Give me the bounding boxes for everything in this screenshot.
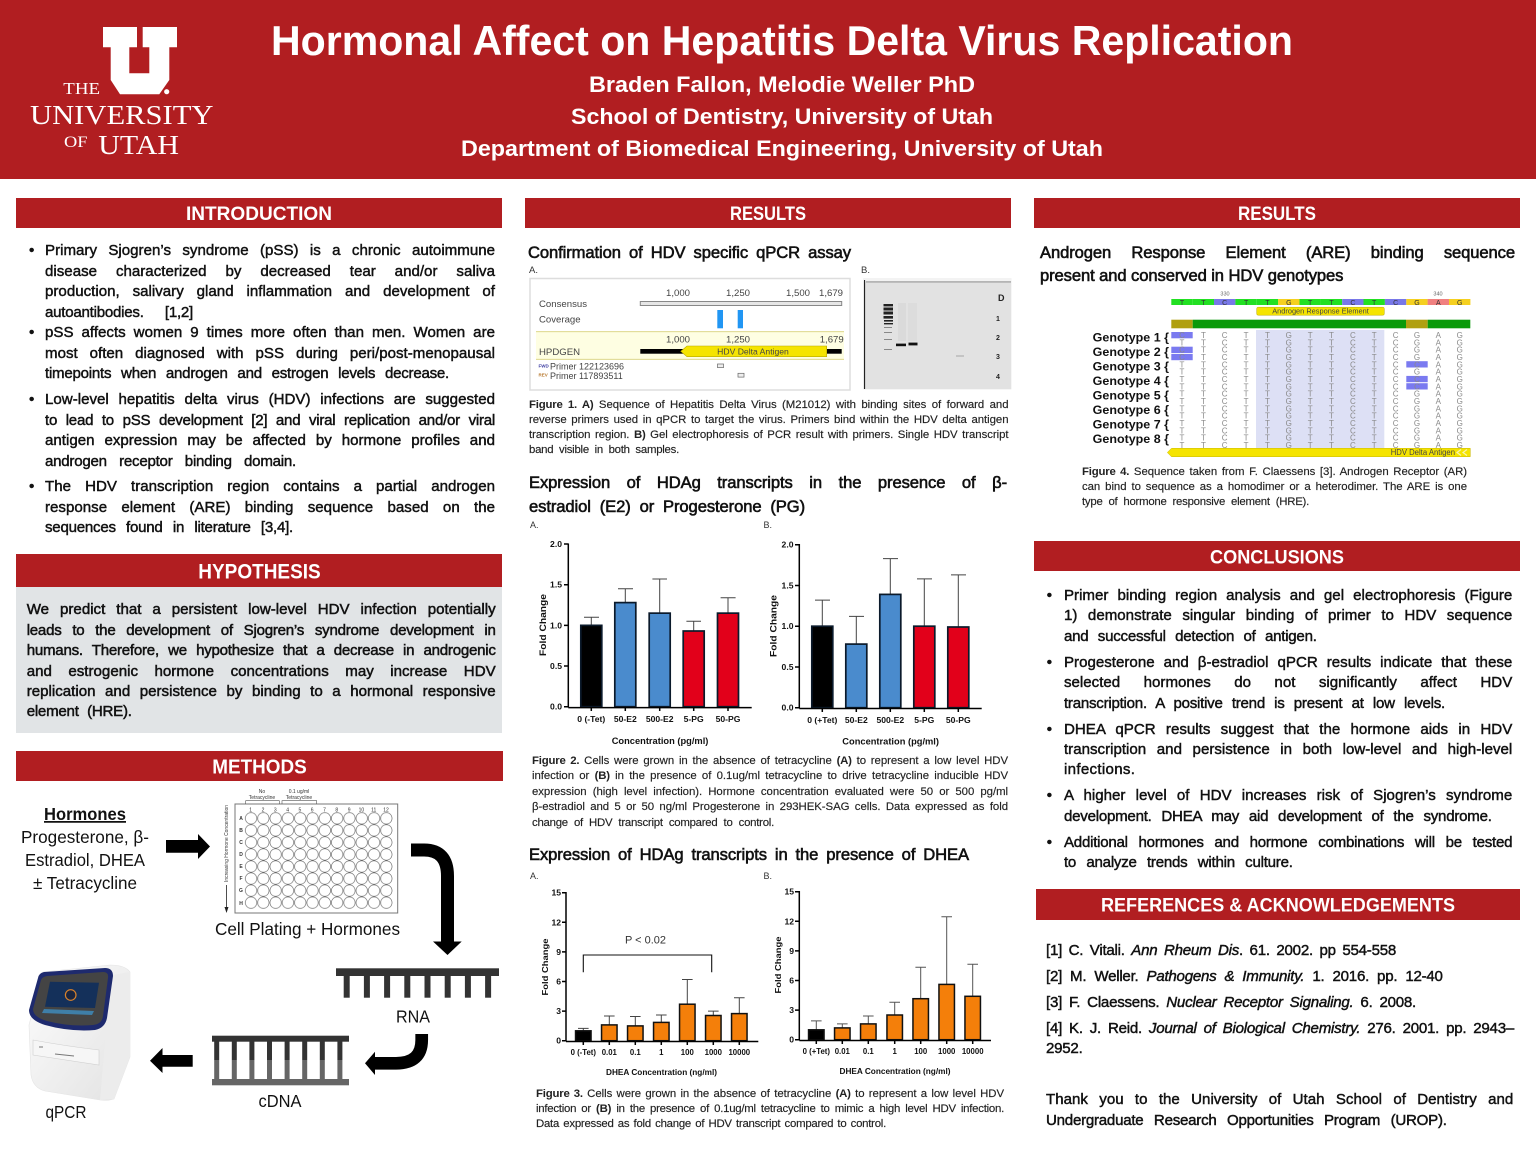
bar chart: figure 3A: A. [530,871,539,881]
authors and affiliations: Department of Biomedical Engineering, University of Utah [461,136,1103,161]
bullet: primer binding analysis: Primer binding region analysis and gel electrophoresis (Figure [1064,587,1512,604]
acknowledgements: Thank you to the University of Utah School of Dentistry and [1046,1091,1513,1108]
reference 4: 2952. [1046,1040,1083,1057]
figure 1B: gel electrophoresis: 3 [996,354,1000,361]
bar chart: figure 3B: 0.1 [863,1047,874,1056]
bar chart: figure 2B [764,520,982,748]
bar chart: figure 2A: 50-PG [716,714,741,724]
bar chart: figure 2A: Fold Change [538,594,549,656]
caption: figure 3: infection or (B) in the presence of 0.1ug/ml tetracycline to mimic a high level HDV infection. [536,1102,1004,1114]
alignment rows: TTCTTGTTCTCGAG [1180,441,1463,450]
acknowledgements: Undergraduate Research Opportunities Program (UROP). [1046,1112,1447,1129]
alignment rows: TTCTTGTTCTCGAG [1180,434,1463,443]
bar chart: figure 3A: 15 [551,888,561,898]
genotype labels: Genotype 6 { [1093,403,1169,417]
hypothesis text box [16,587,502,733]
bar chart: figure 3A: 1 [659,1048,664,1057]
subheading: qPCR assay: Confirmation of HDV specific qPCR assay [528,243,851,262]
authors and affiliations: School of Dentistry, University of Utah [571,104,993,129]
icon: 96-well plate: 12 [383,808,389,814]
caption: figure 4 [1082,466,1467,508]
bar chart: figure 3B: 9 [789,946,794,956]
caption: figure 2: Figure 2. Cells were grown in the absence of tetracycline (A) to represent a low level HDV [532,755,1008,767]
alignment rows: TTCTTGTTCTCGAG [1180,368,1463,377]
authors and affiliations [461,72,1103,161]
bullet: low-level HDV infections: androgen receptor binding domain. [45,453,296,470]
genotype labels [1093,330,1169,446]
panel: methods [16,751,503,1122]
alignment rows: TTCTTGTTCTCGAG [1180,426,1463,435]
bar chart: figure 3A [530,871,758,1077]
bullet: HDV transcription region: • [29,478,34,495]
bar chart: figure 2B: 1.5 [782,580,794,590]
subheading: E2 and PG expression [529,473,1007,516]
genotype labels: Genotype 5 { [1093,388,1169,402]
bar chart: figure 3B: 3 [789,1005,794,1015]
bar chart: figure 2A: Concentration (pg/ml) [612,736,708,747]
arrow: hormones to plate [166,834,210,859]
bar chart: figure 3A: 10000 [728,1048,751,1057]
bar chart: figure 3A: 6 [556,976,561,986]
bullet: DHEA results: transcription and persistence in both low-level and high-level [1064,741,1512,758]
reference sequence row: TTCTTGTTCTCGAG [1180,300,1462,307]
genotype labels: Genotype 3 { [1093,360,1169,374]
reference 2: [2] M. Weller. Pathogens & Immunity. 1. 2016. pp. 12-40 [1046,968,1443,985]
logo: University of Utah [30,27,214,160]
bullet: pSS affects women [29,324,495,382]
bar chart: figure 3B: 0.01 [835,1047,851,1056]
bullet: low-level HDV infections [29,391,495,470]
icon: 96-well plate: G [239,888,243,894]
alignment rows: TTCTTGTTCTCGAG [1180,412,1463,421]
bullet: risk of Sjogren's syndrome [1047,787,1512,825]
figure 1B: gel electrophoresis: 1 [996,316,1000,323]
genotype labels: Genotype 8 { [1093,432,1169,446]
bullet: HDV transcription region: sequences found in literature [3,4]. [45,519,293,536]
bar chart: figure 3B: 6 [789,976,794,986]
bar chart: figure 2B: B. [764,520,772,530]
hypothesis text box: element (HRE). [27,703,132,720]
caption: figure 2: expression (high level infection). Hormone concentration evaluated were 50 or 500 pg/ml [532,786,1008,798]
bullet: additional hormones [1047,834,1512,871]
alignment rows: TTCTTGTTCTCGAG [1180,404,1463,413]
icon: 96-well plate: 11 [371,808,377,814]
alignment rows: CTCTTGTTCTCGAG [1179,331,1463,340]
icon: cDNA double strand [212,1036,349,1085]
bar chart: figure 3A: DHEA Concentration (ng/ml) [606,1067,717,1077]
bar chart: figure 3B: DHEA Concentration (ng/ml) [840,1066,951,1076]
figure 1A: primer map: HDV Delta Antigen [717,346,789,356]
bullet: primer binding analysis: and successful detection of antigen. [1064,628,1317,645]
figure 4: sequence alignment [1093,292,1471,457]
bar chart: figure 2B: 2.0 [782,540,794,550]
logo: University of Utah: OF [64,134,88,151]
annotation: androgen response element: Androgen Response Element [1272,306,1369,316]
bar chart: figure 2B: 0 (+Tet) [807,715,838,725]
reference sequence row: 340 [1433,292,1443,298]
heading: results [525,198,1011,228]
caption: figure 2: infection or (B) in the presence of 0.1ug/ml tetracycline to drive tetracycline inducible HDV [532,770,1008,782]
figure 1B: gel electrophoresis [861,265,1011,389]
bullet: DHEA results: • [1047,721,1052,738]
bar chart: figure 2A: 2.0 [550,539,562,549]
figure 1A: primer map: Coverage [539,314,581,325]
bar chart: figure 2B: 1.0 [782,621,794,631]
bullet: pSS affects women: most often diagnosed with pSS during peri/post-menopausal [45,345,495,362]
alignment rows: TTCTTGTTCTCGAG [1180,390,1463,399]
bar chart: figure 3A: 0.1 [630,1048,641,1057]
bullet: pSS affects women: timepoints when androgen and estrogen levels decrease. [45,365,449,382]
bullet: DHEA results [1047,721,1512,778]
icon: 96-well plate: D [239,852,243,858]
bullet: primer binding analysis: • [1047,587,1052,604]
subheading: E2 and PG expression: Expression of HDAg transcripts in the presence of β- [529,473,1007,492]
figure 1A: primer map: 1,000 [666,334,690,345]
icon: 96-well plate: F [239,876,243,882]
title: Hormonal Affect on Hepatitis Delta Virus Replication [271,17,1293,64]
icon: 96-well plate [224,789,398,913]
hypothesis text box: leads to the development of Sjogren’s syndrome development in [27,622,496,639]
figure 1A: primer map: 1,500 [786,288,810,299]
figure 1A: primer map: 1,000 [666,288,690,299]
bar chart: figure 3B [764,871,991,1076]
figure 1 [529,265,1012,391]
caption: figure 4: type of hormone responsive element (HRE). [1082,496,1309,508]
caption: figure 1: transcription region. B) Gel electrophoresis of PCR result with primers. Single HDV transcript [529,429,1008,441]
heading: conclusions: CONCLUSIONS [1210,546,1344,568]
bar chart: figure 3A: 0 (-Tet) [571,1048,596,1057]
bullet: low-level HDV infections: Low-level hepatitis delta virus (HDV) infections are suggested [45,391,495,408]
heading: conclusions [1034,541,1520,571]
workflow diagram [21,789,499,1122]
bullet: progesterone and estradiol results: selected hormones do not significantly affect HDV [1064,674,1512,691]
significance bracket: P < 0.02 [625,935,666,947]
logo: University of Utah: THE [63,79,100,98]
bar chart: figure 3A: 9 [556,947,561,957]
bar chart: figure 3B: 0 [789,1035,794,1045]
figure 2 [530,520,982,748]
bar chart: figure 3A: Fold Change [540,938,550,996]
icon: 96-well plate: H [239,901,243,907]
reference 3: [3] F. Claessens. Nuclear Receptor Signaling. 6. 2008. [1046,994,1416,1011]
panel: hypothesis [16,554,502,733]
subheading: androgen response element [1040,243,1515,285]
figure 1A: primer map: FWD [538,364,549,368]
caption: figure 3: Figure 3. Cells were grown in the absence of tetracycline (A) to represent a low level HDV [536,1088,1004,1100]
heading: hypothesis [16,554,502,587]
subheading: E2 and PG expression: estradiol (E2) or Progesterone (PG) [529,497,805,516]
bullet: DHEA results: DHEA qPCR results suggest that the hormone aids in HDV [1064,721,1512,738]
figure 1B: gel electrophoresis: 2 [996,335,1000,342]
heading: methods: METHODS [212,756,307,778]
hypothesis text box: replication and persistence by binding to a hormonal responsive [27,683,496,700]
bullet: HDV transcription region: response element (ARE) binding sequence based on the [45,499,495,516]
alignment rows: TTCTTGTTCTCGAG [1180,338,1463,347]
caption: figure 3 [536,1088,1004,1130]
subheading: androgen response element: present and conserved in HDV genotypes [1040,266,1343,285]
bar chart: figure 2A: 500-E2 [646,714,674,724]
bar chart: figure 2B: Concentration (pg/ml) [842,736,939,748]
figure 1A: primer map: Consensus [539,299,587,310]
figure 1A: primer map: Primer 117893511 [550,371,623,381]
text: hormones list: Estradiol, DHEA [25,850,145,870]
bar chart: figure 2B: 0.5 [782,662,794,672]
hypothesis text box: and estrogenic hormone concentrations may increase HDV [27,663,496,680]
alignment rows: CTCTTGTTCTCGAG [1179,353,1463,362]
bullet: primary Sjogren's syndrome: • [29,242,34,259]
icon: 96-well plate: Tetracycline [249,795,275,801]
bullet: additional hormones: Additional hormones and hormone combinations will be tested [1064,834,1512,851]
bar chart: figure 3B: 15 [784,887,794,897]
bullet: risk of Sjogren's syndrome: A higher level of HDV increases risk of Sjogren’s syndrome [1064,787,1512,804]
bullet: pSS affects women: pSS affects women 9 times more often than men. Women are [45,324,495,341]
bar chart: figure 3A: 0.01 [602,1048,618,1057]
annotation: HDV delta antigen arrow: HDV Delta Antigen [1391,448,1455,457]
bar chart: figure 2A: 0.5 [550,661,562,671]
figure 1A: primer map: A. [529,265,538,276]
heading: introduction [16,198,502,228]
caption: figure 2 [532,755,1008,829]
figure 1B: gel electrophoresis: B. [861,265,870,276]
panel: conclusions [1034,541,1520,871]
caption: figure 4: can bind to sequence as a homodimer or a heterodimer. The ARE is one [1082,480,1467,492]
bar chart: figure 3A: 3 [556,1006,561,1016]
panel: results right column [1034,198,1520,508]
label: RNA: RNA [396,1007,430,1027]
bar chart: figure 3B: 100 [914,1047,928,1056]
bullet: low-level HDV infections: antigen expression may be affected by hormone profiles and [45,432,495,449]
label: qPCR: qPCR [46,1102,86,1122]
bar chart: figure 3B: B. [764,871,772,881]
reference 1: [1] C. Vitali. Ann Rheum Dis. 61. 2002. pp 554-558 [1046,942,1396,959]
bullet: primary Sjogren's syndrome [29,242,496,321]
hypothesis text box: humans. Therefore, we hypothesize that a decrease in androgenic [27,642,496,659]
icon: 96-well plate: 10 [359,808,364,814]
bar chart: figure 3A: 12 [551,917,561,927]
bullet: low-level HDV infections: • [29,391,34,408]
alignment rows: TTCTTGTTCTCCAG [1180,360,1463,369]
reference 4: [4] K. J. Reid. Journal of Biological Chemistry. 276. 2001. pp. 2943– [1046,1020,1514,1037]
text: hormones list [21,804,149,893]
icon: 96-well plate: E [239,864,243,870]
bullet: low-level HDV infections: to lead to pSS development [2] and viral replication and/or viral [45,412,495,429]
bullet: HDV transcription region [29,478,495,536]
alignment rows [1171,330,1463,450]
bullet: DHEA results: infections. [1064,761,1135,778]
alignment rows: TTCTTGTTCTCCAG [1180,375,1463,384]
bullet: pSS affects women: • [29,324,34,341]
bar chart: figure 2A: 1.0 [550,620,562,630]
bar chart: figure 3B: 1000 [938,1047,956,1056]
arrow: plate to RNA [411,850,462,955]
bar chart: figure 3B: 1 [893,1047,898,1056]
bar chart: figure 2A: 0 (-Tet) [577,714,605,724]
bar chart: figure 2A [530,520,752,747]
bullet: additional hormones: • [1047,834,1052,851]
icon: 96-well plate: A [239,816,243,822]
panel: results middle column [525,198,1012,1130]
genotype labels: Genotype 7 { [1093,418,1169,432]
bar chart: figure 2A: A. [530,520,539,530]
bullet: progesterone and estradiol results: Progesterone and β-estradiol qPCR results indicate that these [1064,654,1512,671]
bar chart: figure 2B: 50-PG [946,715,971,725]
figure 1A: primer map: 1,679 [820,334,844,345]
icon: 96-well plate: B [239,828,243,834]
bullet: primer binding analysis: 1) demonstrate singular binding of primer to HDV sequence [1064,607,1512,624]
bullet: primary Sjogren's syndrome: autoantibodies. [1,2] [45,304,193,321]
caption: figure 1: band visible in both samples. [529,444,679,456]
bullet: primary Sjogren's syndrome: production, salivary gland inflammation and development of [45,283,495,300]
subheading: androgen response element: Androgen Response Element (ARE) binding sequence [1040,243,1515,262]
caption: figure 1 [529,399,1009,456]
bar chart: figure 2A: 50-E2 [614,714,637,724]
heading: results [1034,198,1520,228]
bar chart: figure 3B: 10000 [962,1047,984,1056]
bar chart: figure 2B: 50-E2 [845,715,868,725]
bar chart: figure 2B: 5-PG [914,715,935,725]
reference 4 [1046,1019,1514,1059]
bar chart: figure 3B: 12 [784,916,794,926]
bullet: progesterone and estradiol results: transcription. A positive trend is present at low levels. [1064,695,1445,712]
authors and affiliations: Braden Fallon, Melodie Weller PhD [589,72,975,97]
logo: University of Utah: UTAH [98,130,179,160]
figure 1A: primer map: 1,250 [726,288,750,299]
header banner [0,0,1536,179]
icon: 96-well plate: Tetracycline [286,795,312,801]
icon: qPCR machine [29,965,130,1100]
annotation: HDV delta antigen arrow [1167,448,1470,457]
icon: 96-well plate: No [259,789,265,795]
panel: introduction [16,198,502,536]
text: hormones list: ± Tetracycline [33,873,137,893]
icon: RNA strand [336,968,499,998]
caption: figure 4: Figure 4. Sequence taken from F. Claessens [3]. Androgen Receptor (AR) [1082,466,1467,478]
genotype labels: Genotype 1 { [1093,330,1169,344]
heading: results: RESULTS [1238,203,1316,225]
heading: methods [16,751,503,781]
bar chart: figure 3A: 1000 [705,1048,723,1057]
figure 1A: primer map: 1,679 [819,288,843,299]
heading: results: RESULTS [730,203,806,225]
text: hormones list: Hormones [44,804,126,824]
caption: figure 3: Data expressed as fold change of HDV transcript compared to control. [536,1118,886,1130]
alignment rows: TTCTTGTTCTCGAG [1180,397,1463,406]
heading: introduction: INTRODUCTION [186,203,332,225]
bar chart: figure 2B: Fold Change [768,595,780,657]
figure 1B: gel electrophoresis: D [998,293,1005,303]
subheading: DHEA expression: Expression of HDAg transcripts in the presence of DHEA [529,845,969,864]
alignment rows: TTCTTGTTCTCGAG [1180,419,1463,428]
figure 1B: gel electrophoresis: 4 [996,374,1000,381]
bar chart: figure 2B: 500-E2 [876,715,904,725]
bullet: HDV transcription region: The HDV transcription region contains a partial androgen [45,478,495,495]
icon: 96-well plate: 123456789 [249,808,351,814]
caption: figure 2: β-estradiol and 5 or 50 ng/ml Progesterone in 293HEK-SAG cells. Data expressed as fold [532,801,1008,813]
alignment rows: TTCTTGTTCTCCAG [1180,382,1463,391]
bullet: risk of Sjogren's syndrome: development. DHEA may aid development of the syndrome. [1064,808,1492,825]
heading: hypothesis: HYPOTHESIS [198,560,321,583]
caption: figure 1: reverse primers used in qPCR to target the virus. Primers bind within the HDV delta antigen [529,414,1008,426]
significance bracket [583,935,712,972]
genotype labels: Genotype 4 { [1093,374,1169,388]
bar chart: figure 2A: 1.5 [550,580,562,590]
alignment rows: CTCTTGTTCTCGAG [1179,346,1463,355]
panel: references and acknowledgements [1036,889,1520,1129]
hypothesis text box: We predict that a persistent low-level HDV infection potentially [27,601,496,618]
caption: figure 1: Figure 1. A) Sequence of Hepatitis Delta Virus (M21012) with binding sites of forward and [529,399,1008,411]
figure 1A: primer map: REV [538,372,548,378]
bar chart: figure 2A: 5-PG [684,714,704,724]
bullet: primary Sjogren's syndrome: disease characterized by decreased tear and/or saliva [45,263,495,280]
reference sequence row [1171,292,1470,307]
figure 1A: primer map: 1,250 [726,334,750,345]
bullet: primer binding analysis [1047,587,1512,645]
label: cDNA: cDNA [258,1091,302,1111]
bullet: risk of Sjogren's syndrome: • [1047,787,1052,804]
figure 1A: primer map: HPDGEN [539,347,580,358]
logo: University of Utah: UNIVERSITY [30,100,214,130]
heading: references and acknowledgements: REFERENCES & ACKNOWLEDGEMENTS [1101,895,1455,917]
arrow: cDNA to qPCR [150,1048,193,1073]
bullet: progesterone and estradiol results [1047,654,1512,712]
caption: figure 2: change of HDV transcript compared to control. [532,817,774,829]
figure 1A: primer map [529,265,850,390]
bar chart: figure 3B: 0 (+Tet) [803,1047,830,1056]
reference sequence row: 330 [1220,292,1230,298]
text: hormones list: Progesterone, β- [21,827,149,847]
bullet: primary Sjogren's syndrome: Primary Sjogren’s syndrome (pSS) is a chronic autoimmune [45,242,495,259]
bar chart: figure 2B: 0.0 [782,703,794,713]
icon: 96-well plate: C [239,840,243,846]
genotype labels: Genotype 2 { [1093,345,1169,359]
bar chart: figure 3A: 0 [556,1036,561,1046]
label: cell plating: Cell Plating + Hormones [215,919,400,939]
icon: 96-well plate: Increasing Hormone Concentration [224,805,230,882]
bullet: additional hormones: to analyze trends within culture. [1064,854,1293,871]
bar chart: figure 3B: Fold Change [773,936,783,994]
acknowledgements [1046,1090,1513,1131]
bullet: progesterone and estradiol results: • [1047,654,1052,671]
icon: 96-well plate: 0.1 ug/ml [289,789,309,795]
arrow: RNA to cDNA [365,1034,422,1075]
figure 1A: primer map: Primer 122123696 [550,362,624,372]
bar chart: figure 2A: 0.0 [550,702,562,712]
figure 3 [530,871,991,1077]
consensus bar [1171,320,1470,328]
bar chart: figure 3A: 100 [681,1048,694,1057]
heading: references and acknowledgements [1036,889,1520,920]
